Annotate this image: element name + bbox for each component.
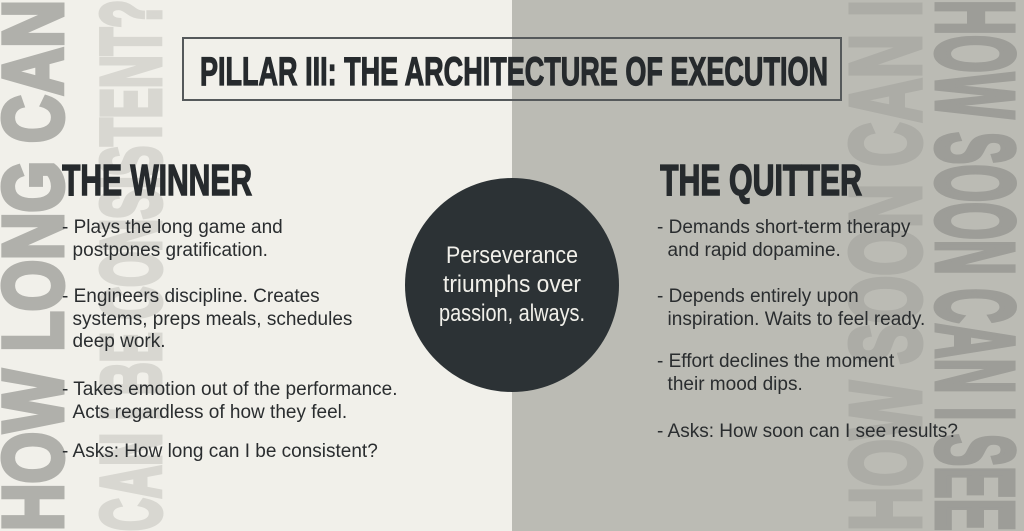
winner list: - Asks: How long can I be consistent? bbox=[62, 441, 378, 462]
winner list: - Takes emotion out of the performance. bbox=[62, 379, 398, 400]
quitter list: - Depends entirely upon bbox=[657, 286, 859, 307]
quitter list: inspiration. Waits to feel ready. bbox=[668, 308, 925, 330]
winner list: deep work. bbox=[73, 331, 166, 352]
quitter list bbox=[657, 217, 958, 442]
quitter list: - Demands short-term therapy bbox=[657, 217, 910, 238]
winner list: - Plays the long game and bbox=[62, 217, 283, 238]
quitter list: their mood dips. bbox=[668, 374, 803, 394]
winner list: - Engineers discipline. Creates bbox=[62, 286, 320, 307]
winner list: postpones gratification. bbox=[73, 240, 268, 260]
center circle callout: triumphs over bbox=[443, 271, 581, 298]
center circle callout: Perseverance bbox=[446, 242, 578, 269]
quitter list: - Asks: How soon can I see results? bbox=[657, 421, 958, 442]
winner list: systems, preps meals, schedules bbox=[73, 308, 352, 330]
right half background bbox=[512, 0, 1024, 531]
winner list bbox=[62, 217, 398, 462]
winner list: Acts regardless of how they feel. bbox=[73, 402, 347, 422]
center circle callout bbox=[405, 178, 619, 392]
center circle callout: passion, always. bbox=[439, 300, 585, 327]
title box bbox=[182, 37, 842, 101]
quitter list: - Effort declines the moment bbox=[657, 351, 894, 372]
quitter list: and rapid dopamine. bbox=[668, 240, 841, 260]
